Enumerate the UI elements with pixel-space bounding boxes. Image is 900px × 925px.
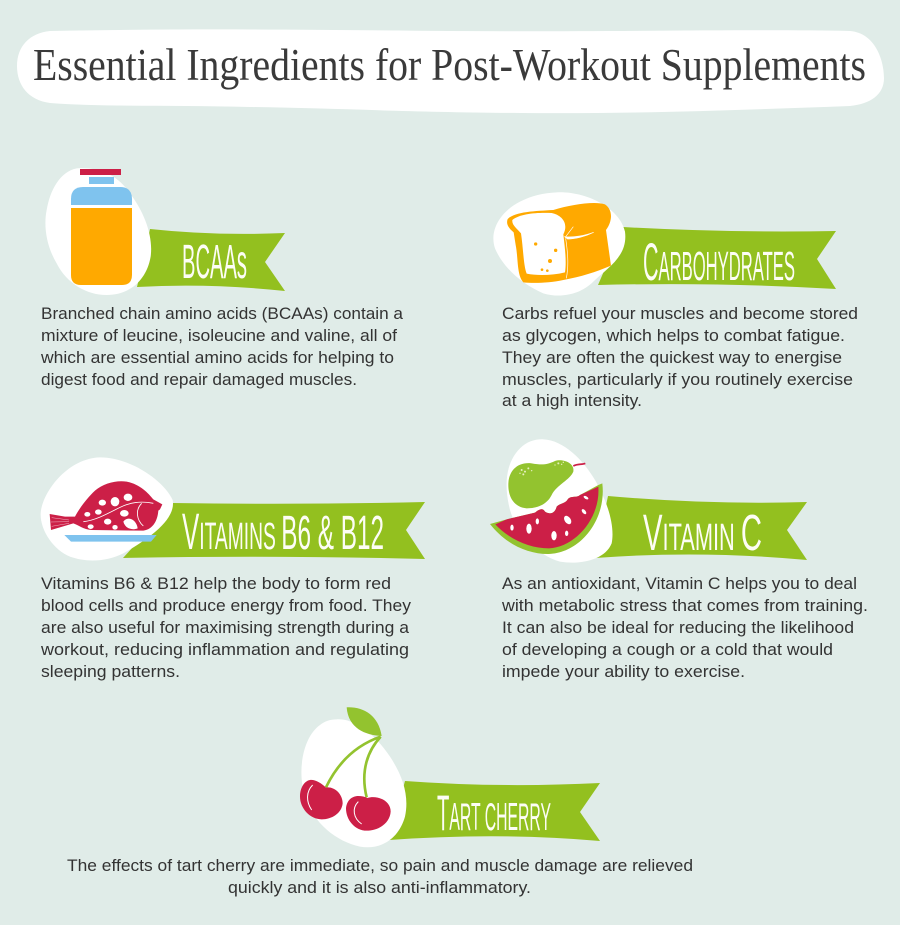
blob: Tart cherry icon background — [301, 719, 406, 847]
icon: fish on a plate — [50, 481, 162, 542]
panel: Tart cherry: TART CHERRY — [437, 785, 551, 841]
panel: Carbohydrates — [493, 192, 858, 410]
text: BCAAs description: digest food and repair damaged muscles. — [41, 370, 357, 389]
panel: Tart cherry — [67, 707, 693, 897]
panel: BCAAs: BCAAs — [182, 236, 247, 289]
text: Vitamin C description — [501, 574, 868, 681]
text: Vitamins description: Vitamins B6 & B12 help the body to form red — [41, 574, 391, 593]
ribbon: Vitamin C — [595, 496, 807, 560]
panel: BCAAs — [40, 168, 404, 389]
text: Tart cherry description — [67, 856, 693, 897]
ribbon: Carbohydrates — [598, 227, 836, 289]
blob: Vitamins icon background — [41, 457, 173, 560]
text: Vitamins description — [40, 574, 412, 681]
text: Vitamin C description: with metabolic stress that comes from training. — [501, 596, 868, 615]
text: Vitamins description: sleeping patterns. — [41, 662, 180, 681]
text: Carbohydrates description: Carbs refuel your muscles and become stored — [502, 304, 858, 323]
text: Tart cherry description: quickly and it is also anti-inflammatory. — [228, 878, 531, 897]
text: Vitamin C description: impede your ability to exercise. — [502, 662, 745, 681]
title banner — [17, 29, 884, 113]
icon: bread loaf — [507, 203, 611, 283]
ribbon: BCAAs — [137, 229, 285, 291]
blob: Vitamin C icon background — [507, 439, 613, 563]
text: Tart cherry description: The effects of tart cherry are immediate, so pain and muscle damage are relieved — [67, 856, 693, 875]
ribbon label: Vitamin C: VITAMIN C — [643, 504, 762, 561]
blob: BCAAs icon background — [45, 168, 151, 295]
ribbon: Vitamins B6 & B12 — [123, 502, 425, 559]
text: Carbohydrates description: at a high intensity. — [502, 391, 642, 410]
text: Carbohydrates description: They are often the quickest way to energise — [502, 348, 842, 367]
text: Vitamin C description: It can also be ideal for reducing the likelihood — [502, 618, 854, 637]
icon: supplement bottle — [71, 169, 132, 285]
panel: Vitamins B6 & B12 — [40, 457, 425, 681]
ribbon label: Vitamins B6 & B12: VITAMINS B6 & B12 — [182, 503, 384, 560]
text: Vitamin C description: of developing a cough or a cold that would — [502, 640, 833, 659]
text: Carbohydrates description: as glycogen, which helps to combat fatigue. — [502, 326, 845, 345]
icon: cherries — [300, 707, 391, 831]
text: Vitamins description: are also useful for maximising strength during a — [41, 618, 410, 637]
text: BCAAs description — [40, 304, 404, 389]
panel: Vitamin C — [490, 439, 868, 681]
text: BCAAs description: mixture of leucine, isoleucine and valine, all of — [41, 326, 397, 345]
text: BCAAs description: which are essential amino acids for helping to — [40, 348, 394, 367]
icon: pear and watermelon — [490, 460, 603, 554]
pear — [508, 460, 573, 508]
text: Vitamins description: workout, reducing inflammation and regulating — [40, 640, 409, 659]
text: Carbohydrates description: muscles, particularly if you routinely exercise — [502, 370, 853, 389]
watermelon — [490, 483, 603, 554]
text: BCAAs description: Branched chain amino acids (BCAAs) contain a — [41, 304, 404, 323]
ribbon: Tart cherry — [389, 781, 600, 841]
blob: Carbohydrates icon background — [493, 192, 625, 296]
text: Carbohydrates description — [502, 304, 858, 410]
text: Vitamin C description: As an antioxidant, Vitamin C helps you to deal — [502, 574, 857, 593]
text: Vitamins description: blood cells and produce energy from food. They — [41, 596, 412, 615]
